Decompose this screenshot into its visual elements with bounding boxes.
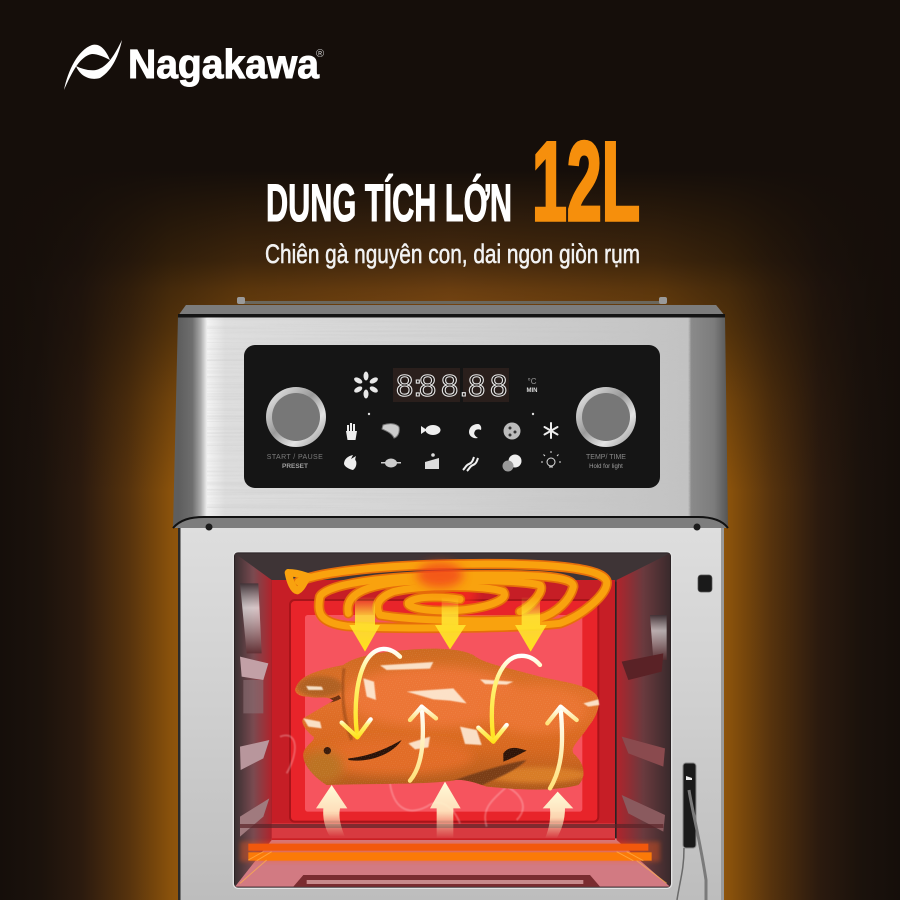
black control panel bbox=[244, 345, 660, 488]
unit labels bbox=[526, 377, 538, 394]
down arrow right bbox=[515, 597, 547, 652]
down arrow middle bbox=[435, 597, 466, 649]
air fryer oven bbox=[173, 297, 728, 900]
roast chicken bbox=[293, 647, 603, 793]
floor strip bbox=[272, 823, 615, 838]
left knob label: START / PAUSE bbox=[267, 454, 323, 461]
rack rail bbox=[240, 824, 663, 828]
fan icon bbox=[353, 372, 379, 398]
up arrow right bbox=[543, 792, 573, 838]
icon: pizza bbox=[504, 422, 520, 440]
left knob bbox=[266, 387, 326, 447]
curved arrow yellow left bbox=[342, 649, 400, 737]
icon: rotisserie bbox=[381, 458, 401, 468]
red back wall bbox=[272, 580, 615, 840]
icon: steak bbox=[382, 424, 399, 438]
left side wall bbox=[235, 553, 272, 887]
left knob label bbox=[267, 454, 323, 470]
down arrow left bbox=[349, 597, 380, 652]
curved arrow yellow right bbox=[478, 656, 540, 742]
heating coil spiral bbox=[288, 564, 607, 628]
right knob label bbox=[586, 454, 626, 470]
logo: Nagakawa bbox=[64, 40, 324, 90]
LED display: 8:88.88 bbox=[396, 368, 507, 403]
unit labels: °C bbox=[528, 377, 537, 386]
red inner wall bbox=[290, 600, 598, 822]
oven window interior bbox=[233, 552, 672, 888]
right knob label: Hold for light bbox=[589, 464, 623, 470]
door latch handle bbox=[677, 763, 706, 900]
right side wall bbox=[617, 553, 670, 887]
icon: cake bbox=[425, 453, 439, 469]
coil arrow tip bbox=[288, 573, 310, 591]
heat haze bbox=[417, 573, 477, 613]
chicken shading bbox=[293, 647, 603, 793]
coil bright stroke bbox=[298, 564, 607, 628]
icon: fruit bbox=[502, 454, 522, 472]
heading: 12L capacity: 12L bbox=[532, 119, 640, 244]
indicator dots bbox=[368, 413, 534, 415]
oven door body bbox=[178, 525, 724, 900]
rod end reflections bbox=[240, 852, 667, 883]
glossy highlights bbox=[303, 662, 599, 749]
heating rods bbox=[240, 842, 660, 862]
registered mark: ® bbox=[316, 48, 324, 60]
icon: light bulb bbox=[541, 451, 561, 467]
up arrow left bbox=[316, 785, 347, 837]
icon: fries bbox=[346, 423, 357, 440]
coil shadow bbox=[298, 564, 607, 628]
control head panel bbox=[173, 305, 728, 530]
ceiling and floor metal bbox=[235, 553, 670, 887]
up arrow middle bbox=[430, 782, 461, 838]
logo swoosh icon bbox=[64, 40, 122, 90]
heading: DUNG TÍCH LỚN: DUNG TÍCH LỚN bbox=[266, 173, 512, 233]
icon: shrimp bbox=[469, 424, 481, 438]
chicken body bbox=[295, 649, 599, 790]
top airflow arrows bbox=[349, 597, 547, 652]
top hinge rail bbox=[237, 297, 667, 304]
bright rear panel bbox=[305, 615, 582, 812]
curved airflow arrows bbox=[342, 649, 577, 788]
logo wordmark: Nagakawa bbox=[128, 41, 320, 87]
door button bbox=[698, 575, 712, 592]
window frame bbox=[233, 552, 672, 888]
icon: snowflake bbox=[544, 423, 558, 438]
icon: fish bbox=[421, 425, 440, 435]
curved arrow white middle bbox=[410, 707, 436, 781]
icon: bacon bbox=[463, 457, 478, 471]
skin speckle texture bbox=[293, 647, 603, 793]
unit labels: MIN bbox=[526, 388, 538, 394]
coil hot spot bbox=[417, 562, 463, 588]
icon: chicken wings bbox=[344, 455, 356, 470]
right knob label: TEMP/ TIME bbox=[586, 454, 626, 461]
left knob label: PRESET bbox=[282, 463, 308, 470]
right knob bbox=[576, 387, 636, 447]
smoke wisps bbox=[280, 735, 523, 827]
subtitle: Chiên gà nguyên con, dai ngon giòn rụm bbox=[265, 239, 640, 269]
bottom airflow arrows bbox=[316, 782, 573, 838]
curved arrow white right bbox=[547, 707, 577, 788]
